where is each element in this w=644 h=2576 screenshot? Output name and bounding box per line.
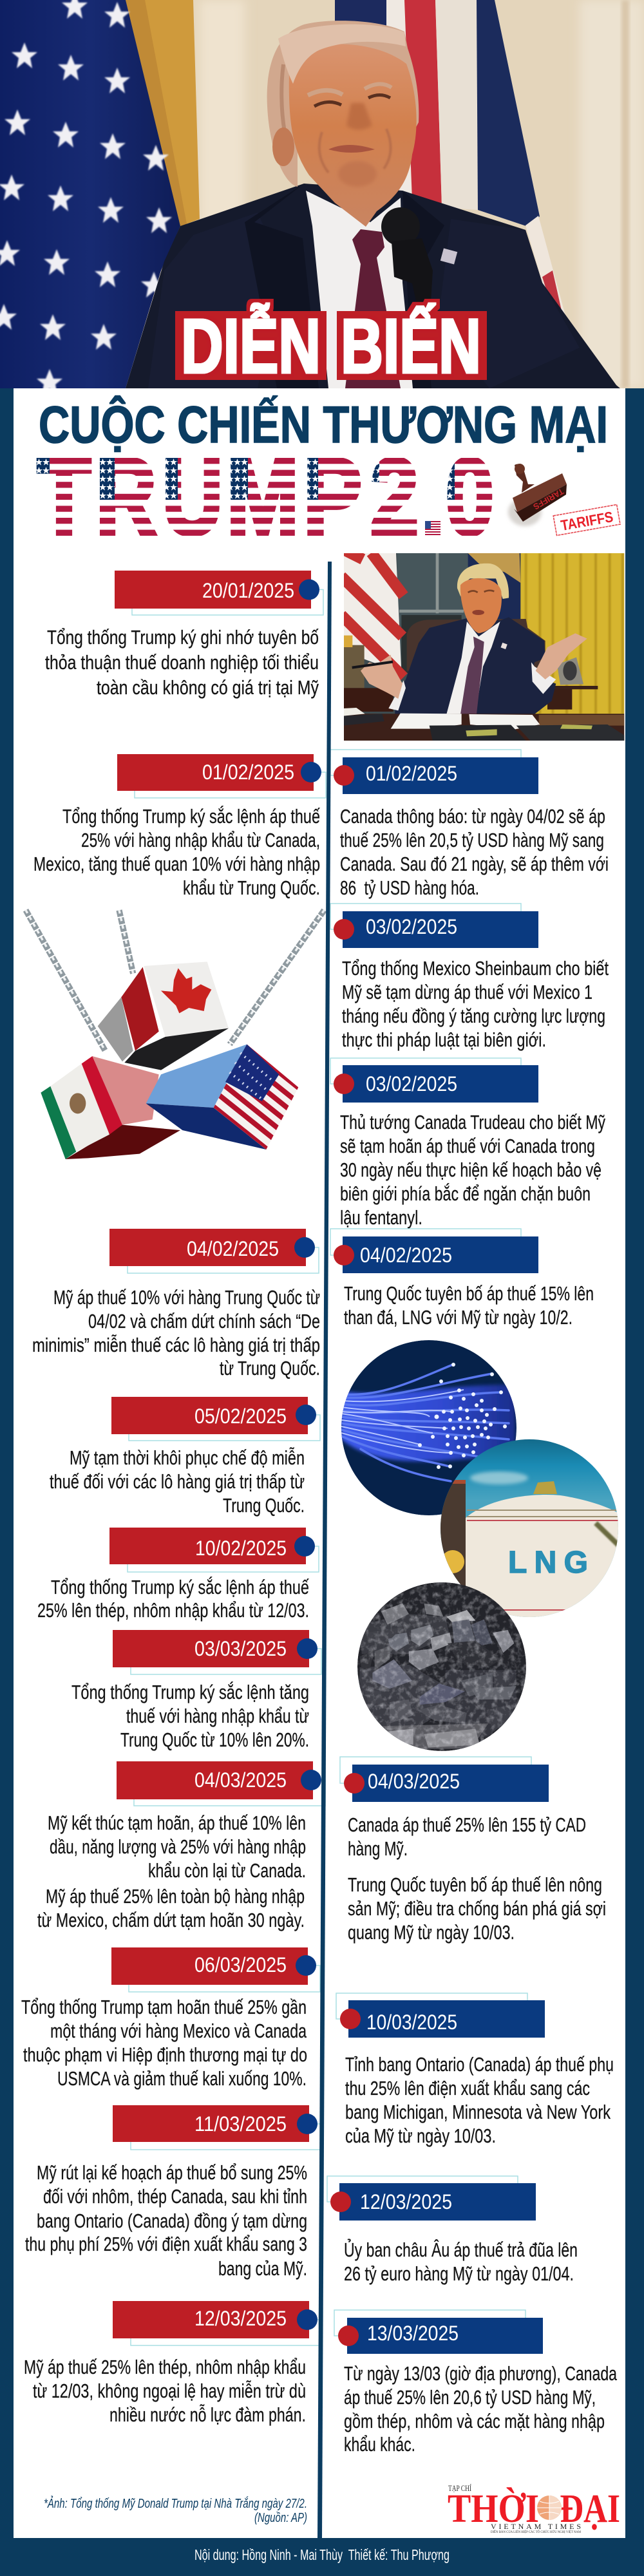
date bar 03/02/2025 blue second: 03/02/2025 bbox=[366, 1072, 457, 1095]
date bar 10/02/2025: 10/02/2025 bbox=[195, 1537, 287, 1560]
date bar 20/01/2025 bbox=[115, 571, 323, 615]
white content panel bbox=[14, 388, 625, 2538]
text block 12/03/2025: từ 12/03, không ngoại lệ hay miễn trừ dù bbox=[33, 2380, 306, 2402]
text block EU retaliation bbox=[344, 2238, 578, 2285]
date bar 04/03/2025 blue: 04/03/2025 bbox=[368, 1770, 460, 1793]
date bar 04/03/2025 bbox=[117, 1761, 325, 1806]
text block 01/02/2025 bbox=[33, 805, 320, 899]
illustration: shipping containers with Canada, Mexico and US flags on chains bbox=[26, 910, 324, 1159]
text block 03/03/2025 bbox=[71, 1681, 309, 1751]
heading: TRUMP 2.0 flag lettering: 0 bbox=[446, 436, 494, 557]
text block 04/03/2025: Mỹ kết thúc tạm hoãn, áp thuế 10% lên bbox=[48, 1812, 306, 1834]
text block Canada Trudeau: lậu fentanyl. bbox=[340, 1206, 422, 1229]
text block Mexico Sheinbaum bbox=[342, 957, 609, 1051]
text block 04/03/2025: từ Mexico, chấm dứt tạm hoãn 30 ngày. bbox=[37, 1909, 305, 1931]
photo circle: coal pile bbox=[357, 1582, 526, 1751]
text block Canada Trudeau bbox=[340, 1111, 605, 1229]
title: DIỄN BIẾN bbox=[175, 302, 487, 390]
text block Canada and China response: quang Mỹ từ ngày 10/03. bbox=[348, 1921, 515, 1944]
text block Canada and China response bbox=[348, 1814, 606, 1944]
text block 05/02/2025: Mỹ tạm thời khôi phục chế độ miễn bbox=[70, 1446, 305, 1469]
timeline spine bbox=[317, 562, 332, 2538]
icon: small US flag as decimal point bbox=[425, 521, 440, 536]
date bar 20/01/2025: 20/01/2025 bbox=[202, 579, 294, 602]
event: 11/03/2025 left bbox=[25, 2105, 321, 2280]
text block 20/01/2025 bbox=[45, 626, 319, 699]
date bar 04/02/2025 blue bbox=[330, 1229, 538, 1273]
text block Mexico Sheinbaum: thực thi pháp luật tại biên giới. bbox=[342, 1028, 546, 1051]
event: 05/02/2025 left bbox=[50, 1397, 320, 1517]
text block 04/03/2025: khẩu còn lại từ Canada. bbox=[148, 1859, 306, 1882]
text block 11/03/2025 bbox=[25, 2161, 307, 2280]
logo: Tạp chí Thời Đại Vietnam Times: THỜI bbox=[448, 2487, 539, 2531]
date bar 03/02/2025 blue bbox=[330, 904, 538, 948]
date bar 12/03/2025 bbox=[113, 2301, 321, 2345]
date bar 01/02/2025: 01/02/2025 bbox=[202, 761, 294, 784]
logo: Tạp chí Thời Đại Vietnam Times: DIỄN ĐÀN CỦA LIÊN HIỆP CÁC TỔ CHỨC HỮU NGHỊ VIỆT NAM bbox=[491, 2529, 581, 2534]
photo circle: LNG storage tank bbox=[440, 1439, 619, 1617]
hero photo: Trump at press conference with flags bbox=[0, 0, 644, 395]
text block 01/02/2025: 25% với hàng nhập khẩu từ Canada, bbox=[81, 829, 320, 851]
event: 06/03/2025 left bbox=[21, 1947, 320, 2090]
text block 11/03/2025: bang Ontario (Canada) đồng ý tạm dừng bbox=[37, 2210, 307, 2232]
text block 11/03/2025: đối với nhôm, thép Canada, sau khi tỉnh bbox=[43, 2185, 307, 2208]
event: 04/02/2025 right bbox=[330, 1229, 594, 1329]
date bar 11/03/2025 bbox=[113, 2105, 321, 2150]
photo caption: (Nguồn: AP) bbox=[254, 2511, 307, 2525]
text block 03/03/2025: Tổng thống Trump ký sắc lệnh tăng bbox=[71, 1681, 309, 1703]
text block 06/03/2025: Tổng thống Trump tạm hoãn thuế 25% gần bbox=[21, 1996, 307, 2018]
text block De minimis: minimis” miễn thuế các lô hàng giá trị thấp bbox=[32, 1334, 320, 1356]
date bar 05/02/2025: 05/02/2025 bbox=[194, 1405, 287, 1428]
date bar 04/02/2025 blue: 04/02/2025 bbox=[360, 1244, 452, 1267]
text block 03/03/2025: thuế với hàng nhập khẩu từ bbox=[126, 1705, 309, 1727]
title: DIỄN BIẾN: BIẾN bbox=[341, 302, 481, 390]
text block Canada 13/03: khẩu khác. bbox=[344, 2433, 415, 2456]
event: 03/02/2025 Canada right bbox=[330, 1058, 605, 1229]
event: 20/01/2025 left bbox=[45, 571, 323, 699]
text block 05/02/2025: thuế đối với các lô hàng giá trị thấp từ bbox=[50, 1470, 305, 1493]
event: 04/02/2025 left bbox=[32, 1229, 320, 1379]
text block 06/03/2025: một tháng với hàng Mexico và Canada bbox=[50, 2020, 307, 2042]
text block 20/01/2025: toàn cầu không có giá trị tại Mỹ bbox=[97, 676, 319, 699]
event: 10/03/2025 right bbox=[336, 1993, 614, 2147]
text block 12/03/2025 bbox=[24, 2356, 306, 2426]
text block 04/03/2025: Mỹ áp thuế 25% lên toàn bộ hàng nhập bbox=[46, 1885, 305, 1908]
text block 12/03/2025: Mỹ áp thuế 25% lên thép, nhôm nhập khẩu bbox=[24, 2356, 306, 2378]
text block 06/03/2025: thuộc phạm vi Hiệp định thương mại tự do bbox=[23, 2043, 307, 2066]
photo caption bbox=[44, 2496, 307, 2525]
date bar 03/03/2025 bbox=[113, 1630, 321, 1674]
text block De minimis: từ Trung Quốc. bbox=[220, 1357, 320, 1379]
text block 11/03/2025: bang của Mỹ. bbox=[218, 2257, 307, 2280]
date bar 13/03/2025 blue bbox=[334, 2310, 543, 2354]
icon: wooden tariff stamp bbox=[508, 464, 567, 526]
title: DIỄN BIẾN: DIỄN bbox=[181, 302, 321, 390]
text block 20/01/2025: Tổng thống Trump ký ghi nhớ tuyên bố bbox=[47, 626, 319, 649]
text block EU retaliation: 26 tỷ euro hàng Mỹ từ ngày 01/04. bbox=[344, 2262, 574, 2285]
photo: Trump in Oval Office signing at desk bbox=[337, 546, 624, 741]
heading: TRUMP 2.0 flag lettering: U bbox=[162, 436, 223, 557]
logo: Tạp chí Thời Đại Vietnam Times: TẠP CHÍ bbox=[448, 2483, 471, 2493]
logo: Tạp chí Thời Đại Vietnam Times bbox=[448, 2483, 620, 2534]
date bar 01/02/2025 bbox=[117, 754, 326, 798]
text block 06/03/2025 bbox=[21, 1996, 307, 2090]
date bar 13/03/2025 blue: 13/03/2025 bbox=[367, 2322, 459, 2345]
text block 01/02/2025: Tổng thống Trump ký sắc lệnh áp thuế bbox=[62, 805, 320, 828]
text block Canada announcement: 86 tỷ USD hàng hóa. bbox=[340, 876, 479, 899]
text block 04/03/2025: dầu, năng lượng và 25% với hàng nhập bbox=[50, 1835, 306, 1858]
event: 01/02/2025 left bbox=[33, 754, 326, 899]
event: 03/02/2025 Mexico right bbox=[330, 904, 609, 1051]
text block 03/03/2025: Trung Quốc từ 10% lên 20%. bbox=[120, 1728, 309, 1751]
date bar 01/02/2025 blue: 01/02/2025 bbox=[366, 762, 457, 785]
text block Ontario surcharge bbox=[345, 2053, 614, 2147]
text block 12/03/2025: nhiều nước nỗ lực đàm phán. bbox=[109, 2403, 306, 2426]
date bar 12/03/2025 blue bbox=[327, 2176, 536, 2221]
text block De minimis: 04/02 và chấm dứt chính sách “De bbox=[88, 1310, 320, 1332]
date bar 04/03/2025 blue bbox=[340, 1757, 549, 1802]
icon: red TARIFFS stamp mark: TARIFFS bbox=[560, 508, 614, 534]
heading: TRUMP 2.0 flag lettering: M bbox=[227, 436, 299, 557]
text block 06/03/2025: USMCA và giảm thuế kali xuống 10%. bbox=[57, 2067, 307, 2090]
event: 04/03/2025 right bbox=[340, 1757, 606, 1944]
text block 10/02/2025: Tổng thống Trump ký sắc lệnh áp thuế bbox=[51, 1576, 309, 1598]
text block 11/03/2025: Mỹ rút lại kế hoạch áp thuế bổ sung 25% bbox=[37, 2161, 307, 2184]
text block 10/02/2025 bbox=[37, 1576, 309, 1622]
date bar 03/02/2025 blue: 03/02/2025 bbox=[366, 915, 457, 938]
logo: Tạp chí Thời Đại Vietnam Times: VIETNAM TIMES bbox=[491, 2522, 581, 2531]
date bar 10/03/2025 blue bbox=[336, 1993, 545, 2038]
date bar 03/03/2025: 03/03/2025 bbox=[194, 1637, 287, 1660]
date bar 03/02/2025 blue second bbox=[330, 1058, 538, 1103]
event: 12/03/2025 left bbox=[24, 2301, 321, 2426]
event: 01/02/2025 right bbox=[330, 750, 609, 899]
text block De minimis: Mỹ áp thuế 10% với hàng Trung Quốc từ bbox=[53, 1286, 320, 1309]
date bar 06/03/2025: 06/03/2025 bbox=[194, 1953, 287, 1976]
text block 10/02/2025: 25% lên thép, nhôm nhập khẩu từ 12/03. bbox=[37, 1599, 309, 1622]
date bar 12/03/2025 blue: 12/03/2025 bbox=[360, 2190, 452, 2213]
icon: wooden tariff stamp: TARIFFS bbox=[531, 486, 565, 512]
text block Canada and China response: hàng Mỹ. bbox=[348, 1837, 408, 1860]
text block China 15 percent: than đá, LNG với Mỹ từ ngày 10/2. bbox=[344, 1306, 573, 1329]
text block 05/02/2025: Trung Quốc. bbox=[223, 1494, 305, 1517]
text block 20/01/2025: thỏa thuận thuế doanh nghiệp tối thiểu bbox=[45, 651, 319, 674]
heading: TRUMP 2.0 flag lettering: 2 bbox=[370, 436, 419, 557]
heading: TRUMP 2.0 flag lettering: T bbox=[37, 436, 91, 557]
text block Canada announcement bbox=[340, 805, 609, 899]
text block China 15 percent bbox=[344, 1282, 594, 1329]
date bar 01/02/2025 blue bbox=[330, 750, 538, 794]
logo: Tạp chí Thời Đại Vietnam Times: ĐẠI bbox=[560, 2487, 620, 2531]
text block Canada 13/03 bbox=[344, 2362, 618, 2456]
date bar 04/02/2025 bbox=[109, 1229, 319, 1273]
date bar 12/03/2025: 12/03/2025 bbox=[194, 2307, 287, 2330]
event: 12/03/2025 right bbox=[327, 2176, 578, 2285]
text block De minimis bbox=[32, 1286, 320, 1379]
photo circle: blue optical fibre bbox=[341, 1340, 516, 1515]
heading: TRUMP 2.0 flag lettering: P bbox=[303, 436, 362, 557]
date bar 11/03/2025: 11/03/2025 bbox=[194, 2112, 287, 2136]
photo caption: *Ảnh: Tổng thống Mỹ Donald Trump tại Nhà Trắng ngày 27/2. bbox=[44, 2496, 307, 2511]
credits: Nội dung: Hồng Ninh - Mai Thùy Thiết kế: Thu Phượng bbox=[194, 2546, 450, 2563]
heading: TRUMP 2.0 flag lettering: R bbox=[96, 436, 156, 557]
date bar 05/02/2025 bbox=[111, 1397, 320, 1441]
date bar 10/02/2025 bbox=[109, 1528, 319, 1572]
text block 11/03/2025: thu phụ phí 25% với điện xuất khẩu sang 3 bbox=[25, 2233, 307, 2255]
date bar 06/03/2025 bbox=[111, 1947, 320, 1992]
text block Ontario surcharge: của Mỹ từ ngày 10/03. bbox=[345, 2125, 496, 2147]
text block 01/02/2025: khẩu từ Trung Quốc. bbox=[183, 876, 320, 899]
text block 05/02/2025 bbox=[50, 1446, 305, 1517]
date bar 04/02/2025: 04/02/2025 bbox=[187, 1237, 279, 1260]
text block 01/02/2025: Mexico, tăng thuế quan 10% với hàng nhập bbox=[33, 853, 320, 875]
event: 10/02/2025 left bbox=[37, 1528, 319, 1622]
date bar 10/03/2025 blue: 10/03/2025 bbox=[366, 2011, 457, 2034]
photo circle: LNG storage tank: LNG bbox=[508, 1546, 588, 1580]
heading: TRUMP 2.0 flag lettering bbox=[37, 436, 494, 557]
event: 03/03/2025 left bbox=[71, 1630, 321, 1751]
event: 04/03/2025 left bbox=[37, 1761, 325, 1931]
event: 13/03/2025 right bbox=[334, 2310, 618, 2456]
date bar 04/03/2025: 04/03/2025 bbox=[194, 1768, 287, 1792]
text block 04/03/2025 bbox=[37, 1812, 306, 1931]
